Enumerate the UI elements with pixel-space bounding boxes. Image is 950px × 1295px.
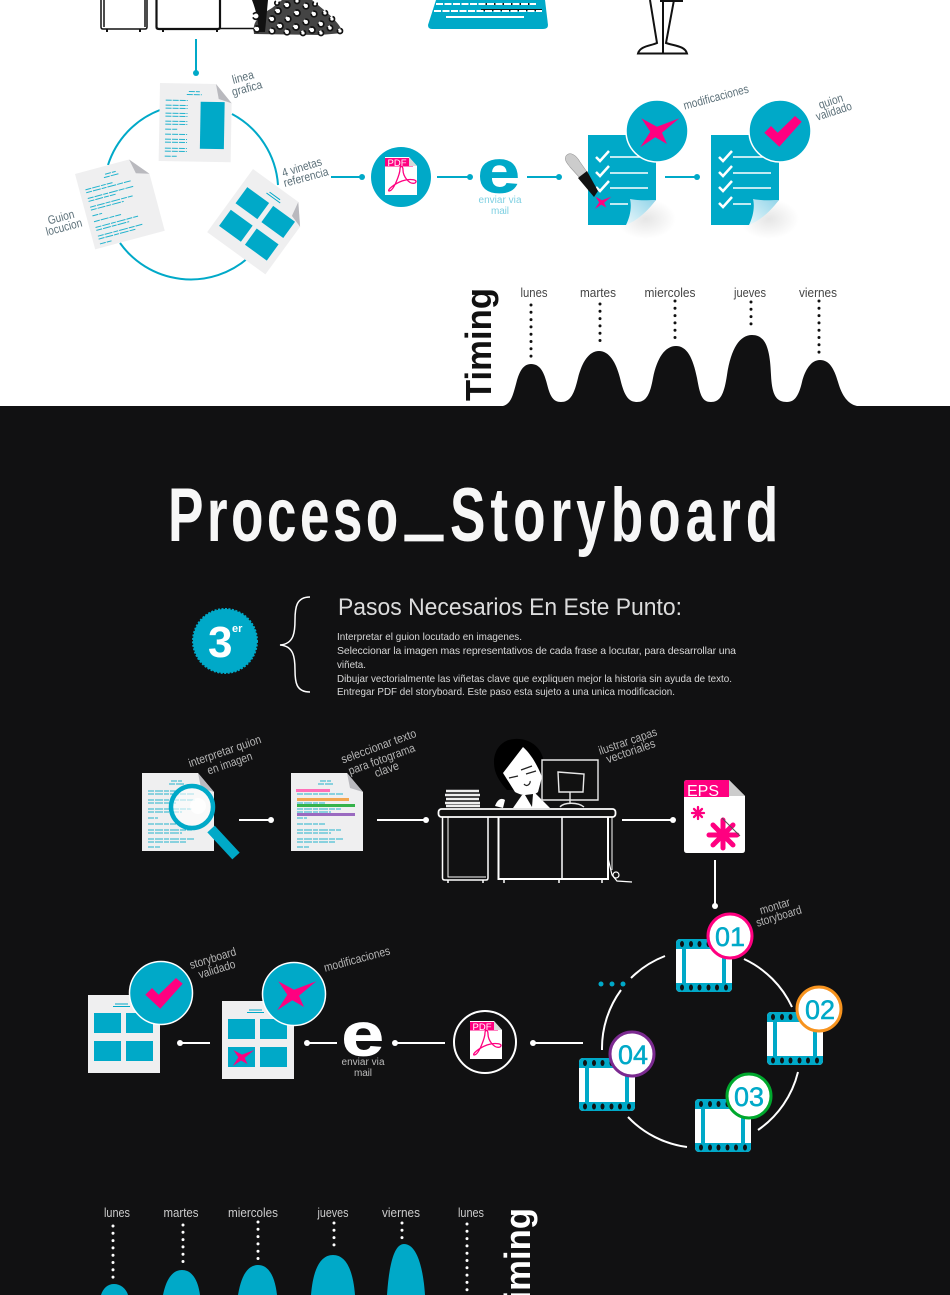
- pile of paper balls: [252, 0, 343, 36]
- label: enviar via mail: mail: [354, 1068, 372, 1079]
- document with highlights: [291, 773, 363, 851]
- icon: marker pen: [565, 154, 598, 197]
- connector to review: [527, 174, 562, 180]
- storyboard with modifications: [222, 962, 326, 1079]
- timing day labels: lunes: [520, 286, 548, 300]
- connector: [622, 817, 676, 823]
- steps text: viñeta.: [337, 659, 366, 671]
- film frame 04: 04: [618, 1040, 648, 1070]
- cycle ring: [108, 110, 278, 279]
- standing person legs: [638, 0, 687, 54]
- ellipsis dots: [598, 982, 626, 986]
- storyboard validated: [88, 962, 192, 1073]
- label: enviar via mail: enviar via: [478, 195, 522, 206]
- film cycle ring: [602, 956, 798, 1147]
- checklist with modifications: [588, 100, 688, 239]
- timing day labels: bottom: jueves: [317, 1206, 348, 1220]
- label: enviar via mail: mail: [491, 206, 509, 217]
- label: interpretar quion en imagen: interpretar quion: [186, 732, 263, 770]
- document: guion locucion: [75, 155, 165, 249]
- label: interpretar quion en imagen: [186, 732, 263, 777]
- timing curve: white section: [495, 335, 860, 410]
- label: storyboard validado: storyboard: [188, 944, 238, 972]
- film frame 02: [767, 987, 841, 1065]
- icon: PDF circle: [371, 147, 431, 207]
- connector from desk: [193, 39, 199, 76]
- timing day labels: martes: [580, 286, 616, 300]
- timing heading: Timing: [458, 288, 499, 401]
- label: seleccionar texto: seleccionar texto: [339, 726, 418, 766]
- timing day labels: miercoles: [644, 286, 696, 300]
- label: ilustrar capas vectoriales: [597, 725, 659, 766]
- title: _: [404, 363, 444, 558]
- label: quion validado: validado: [814, 99, 854, 124]
- label: ilustrar capas vectoriales: vectoriales: [604, 736, 657, 766]
- film frame 04: [579, 1032, 654, 1111]
- label: 4 vinetas referencia: 4 vinetas: [280, 154, 323, 180]
- steps text: [337, 631, 736, 698]
- title: Storyboard: [450, 473, 778, 557]
- label: storyboard validado: validado: [197, 957, 237, 981]
- film frame 03: 03: [734, 1082, 764, 1112]
- icon: PDF ring: [454, 1011, 516, 1073]
- label: linea grafica: grafica: [230, 77, 264, 99]
- heading: pasos necesarios: Pasos Necesarios En Este Punto:: [338, 594, 682, 621]
- timing day labels: bottom: [104, 1206, 484, 1220]
- title: Proceso: [168, 473, 398, 557]
- brace: [280, 597, 310, 692]
- icon: EPS file: EPS: [687, 783, 719, 800]
- label: enviar via mail: enviar via: [342, 1057, 385, 1068]
- icon: PDF ring: PDF: [472, 1022, 492, 1033]
- timing dotted markers: [531, 301, 819, 360]
- film frame 02: 02: [805, 995, 835, 1025]
- connector to email: [437, 174, 473, 180]
- connector: [530, 1040, 583, 1046]
- connector to validated: [665, 174, 700, 180]
- film frame 03: [695, 1074, 771, 1152]
- title: [168, 363, 778, 558]
- steps text: Seleccionar la imagen mas representativos de cada frase a locutar, para desarrollar una: [337, 645, 736, 657]
- label: 4 vinetas referencia: [280, 154, 330, 190]
- label: enviar via mail: [342, 1057, 385, 1079]
- desk illustration fragment: [101, 0, 256, 32]
- connector: [377, 817, 429, 823]
- label: quion validado: quion: [817, 91, 845, 112]
- document with magnifier: [142, 773, 236, 856]
- label: interpretar quion en imagen: en imagen: [205, 749, 254, 777]
- timing day labels: [520, 286, 837, 300]
- icon: EPS file: [684, 780, 745, 853]
- timing humps: bottom: [101, 1244, 425, 1295]
- vertical connector: [712, 860, 718, 909]
- label: seleccionar texto: [339, 726, 418, 780]
- blue typewriter: [428, 0, 548, 29]
- label: montar storyboard: storyboard: [754, 903, 803, 930]
- label: seleccionar texto: para fotograma: [346, 741, 417, 778]
- label: modificaciones: modificaciones: [682, 82, 750, 113]
- badge: 3er: 3: [208, 618, 232, 667]
- label: enviar via mail: [478, 195, 522, 217]
- timing day labels: viernes: [799, 286, 837, 300]
- steps text: Interpretar el guion locutado en imagenes.: [337, 631, 522, 643]
- film frame 01: 01: [715, 922, 745, 952]
- timing day labels: bottom: martes: [164, 1206, 198, 1220]
- label: modificaciones: modificaciones: [322, 944, 392, 975]
- connector: [177, 1040, 210, 1046]
- steps text: Dibujar vectorialmente las viñetas clave que expliquen mejor la historia sin ayuda de texto.: [337, 673, 732, 685]
- connector to PDF: [331, 174, 365, 180]
- label: 4 vinetas referencia: referencia: [282, 164, 330, 190]
- timing day labels: bottom: miercoles: [228, 1206, 278, 1220]
- timing day labels: bottom: viernes: [382, 1206, 420, 1220]
- icon: email e: e: [478, 137, 520, 206]
- timing dotted markers: bottom: [113, 1222, 467, 1292]
- label: seleccionar texto: clave: [372, 758, 401, 780]
- label: storyboard validado: [188, 944, 238, 981]
- label: ilustrar capas vectoriales: ilustrar capas: [597, 725, 659, 758]
- badge: 3er: [193, 609, 257, 673]
- badge: 3er: er: [232, 623, 243, 635]
- timing day labels: bottom: lunes: [458, 1206, 484, 1220]
- label: guion locucion: locucion: [44, 216, 84, 239]
- label: linea grafica: [230, 67, 264, 99]
- label: guion locucion: [44, 207, 84, 239]
- timing day labels: jueves: [733, 286, 766, 300]
- icon: PDF circle: PDF: [388, 158, 407, 169]
- document: linea grafica: [159, 83, 232, 162]
- dark background panel: [0, 406, 950, 1295]
- film frame 01: [676, 914, 752, 992]
- checklist validated: [711, 100, 811, 239]
- connector: [392, 1040, 445, 1046]
- label: linea grafica: linea: [231, 67, 256, 87]
- steps text: Entregar PDF del storyboard. Este paso esta sujeto a una unica modificacion.: [337, 686, 675, 698]
- illustration: person at desk: [438, 739, 632, 883]
- timing day labels: bottom: lunes: [104, 1206, 130, 1220]
- icon: email e: e: [342, 1000, 384, 1069]
- connector: [304, 1040, 337, 1046]
- document: 4 vinetas referencia: [207, 169, 311, 274]
- label: montar storyboard: montar: [758, 895, 792, 917]
- connector: [239, 817, 274, 823]
- label: guion locucion: Guion: [46, 207, 76, 227]
